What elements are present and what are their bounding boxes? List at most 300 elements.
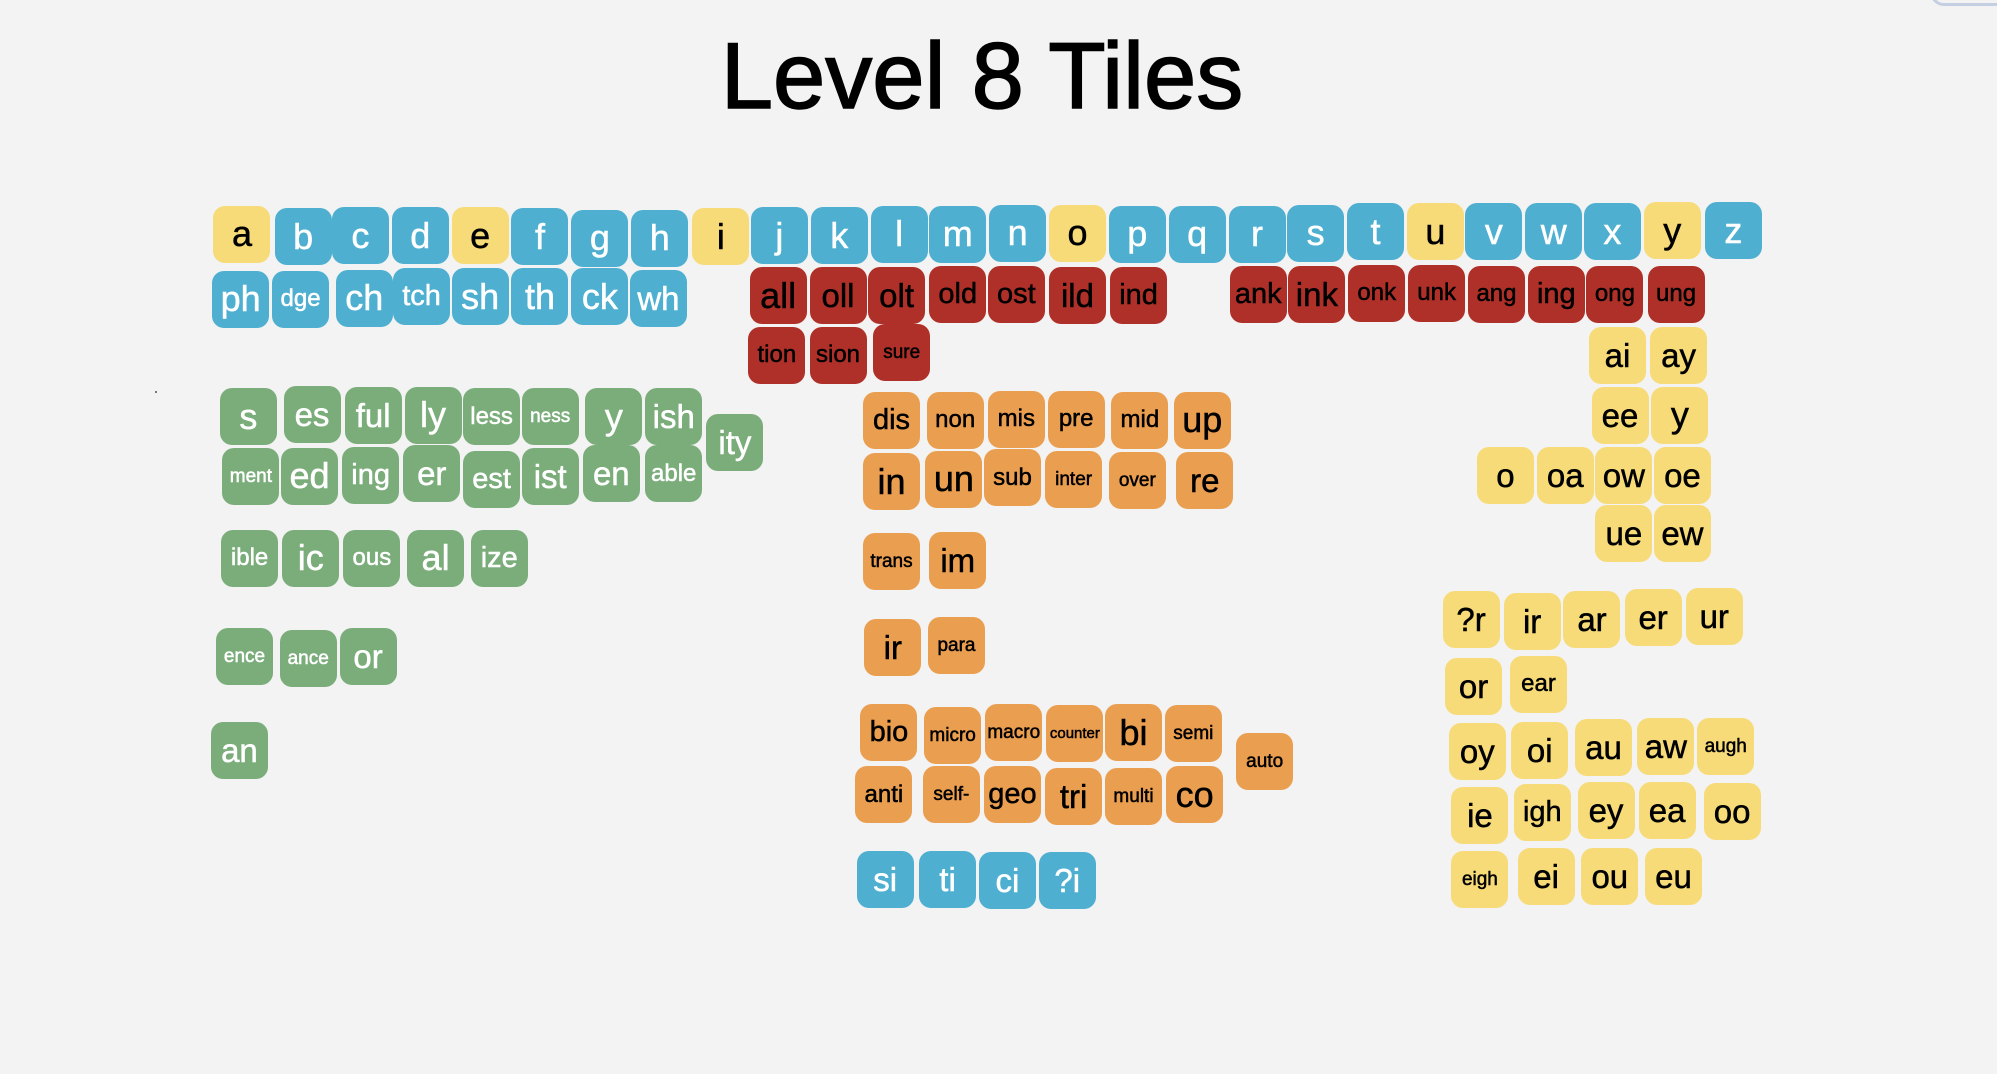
tile: oll: oll <box>822 277 855 314</box>
tile: able: able <box>651 460 696 487</box>
tile: counter: counter <box>1050 725 1100 742</box>
tile: ence <box>216 628 273 685</box>
tile: ow <box>1595 447 1652 504</box>
panel: green suffixes row four <box>216 628 397 687</box>
tile: unk <box>1408 265 1465 322</box>
tile: o: o <box>1067 212 1087 253</box>
panel: alphabet row <box>213 202 1762 267</box>
tile: al: al <box>422 537 450 578</box>
tile: unk: unk <box>1417 279 1456 306</box>
tile: b <box>275 208 332 265</box>
tile: oy <box>1449 723 1506 780</box>
tile: ence: ence <box>224 646 265 667</box>
tile: h <box>631 210 688 267</box>
tile: ing <box>1528 266 1585 323</box>
tile: x: x <box>1603 211 1621 252</box>
tile: old: old <box>938 278 977 310</box>
tile: aw <box>1637 718 1694 775</box>
tile: est <box>463 450 520 508</box>
tile: igh <box>1514 784 1571 841</box>
tile: wh: wh <box>637 280 680 317</box>
tile: v: v <box>1485 211 1503 252</box>
tile: ai: ai <box>1605 337 1630 374</box>
tile: ind <box>1110 267 1167 324</box>
tile: ful <box>345 387 402 444</box>
tile: ost: ost <box>997 278 1036 310</box>
tile: mis <box>988 391 1045 448</box>
tile: ea <box>1639 782 1696 839</box>
tile: semi <box>1165 705 1222 762</box>
tile: or: or <box>1459 668 1488 705</box>
tile: para: para <box>937 635 975 656</box>
tile: oa: oa <box>1547 457 1584 494</box>
tile: ar: ar <box>1577 601 1607 638</box>
tile: ly <box>405 387 462 444</box>
tile: es: es <box>295 396 329 433</box>
tile: j <box>751 207 808 264</box>
tile: ?r: ?r <box>1456 601 1486 638</box>
tile: sion <box>810 327 867 384</box>
tile: ize: ize <box>481 542 518 574</box>
tile: sh <box>452 268 509 325</box>
tile: c: c <box>351 215 369 256</box>
tile: pre: pre <box>1059 405 1094 432</box>
tile: over: over <box>1119 470 1156 491</box>
tile: ue <box>1595 505 1652 562</box>
tile: tri: tri <box>1060 778 1087 815</box>
tile: ly: ly <box>420 394 446 435</box>
tile: augh <box>1697 718 1754 775</box>
tile: ai <box>1589 327 1646 384</box>
tile: augh: augh <box>1705 736 1747 757</box>
tile: ir: ir <box>1523 603 1541 640</box>
tile: eu <box>1645 848 1702 905</box>
tile: er <box>1625 589 1682 646</box>
tile: ing: ing <box>351 459 390 491</box>
tile: er: er <box>1638 599 1668 636</box>
tile: eigh: eigh <box>1462 869 1498 890</box>
tile: macro <box>985 704 1042 761</box>
tile: ank <box>1230 266 1287 323</box>
tile: d: d <box>410 215 430 256</box>
tile: im <box>929 532 986 589</box>
tile: or <box>1445 658 1502 715</box>
tile: ful: ful <box>356 397 391 434</box>
tile: auto <box>1236 733 1293 790</box>
tile: ey: ey <box>1589 792 1623 829</box>
tile: olt: olt <box>879 277 914 314</box>
tile: all <box>750 267 807 324</box>
tile: w: w <box>1541 211 1567 252</box>
tile: u: u <box>1425 211 1445 252</box>
tile: ur <box>1686 588 1743 645</box>
tile: dge: dge <box>281 285 321 312</box>
tile: pre <box>1048 391 1105 448</box>
tile: ink: ink <box>1296 276 1338 313</box>
tile: re: re <box>1190 462 1219 499</box>
tile: ink <box>1288 266 1345 323</box>
tile: e <box>452 207 509 264</box>
tile: oi <box>1511 722 1568 779</box>
tile: z <box>1705 202 1762 259</box>
tile: geo <box>984 766 1041 823</box>
tile: si: si <box>873 861 897 898</box>
tile: un <box>925 450 982 508</box>
tile: all: all <box>760 275 796 316</box>
panel: red welded sounds one <box>750 266 1167 324</box>
tile: p <box>1109 206 1166 263</box>
tile: y <box>585 388 642 445</box>
tile: ous <box>343 530 400 586</box>
tile: micro <box>924 707 981 764</box>
tile: sure <box>873 324 930 381</box>
tile: ?r <box>1443 591 1500 648</box>
tile: geo: geo <box>988 778 1037 810</box>
tile: er: er <box>417 455 446 492</box>
tile: y: y <box>1663 210 1681 251</box>
tile: ment: ment <box>230 466 272 487</box>
panel: yellow vowel teams <box>1449 718 1761 908</box>
tile: p: p <box>1127 213 1147 254</box>
tile: dis <box>863 392 920 449</box>
tile: sub: sub <box>993 464 1032 491</box>
tile: er <box>403 445 460 502</box>
tile: non: non <box>935 406 975 433</box>
tile: th <box>511 268 568 325</box>
tile: ment <box>222 448 279 505</box>
tile: y: y <box>605 396 623 437</box>
tile: old <box>929 266 986 323</box>
tile: multi <box>1105 768 1162 825</box>
tile: ci: ci <box>995 862 1019 899</box>
tile: ci <box>979 852 1036 909</box>
tile: si <box>857 851 914 908</box>
tile: ild <box>1049 267 1106 324</box>
tile: ish: ish <box>653 398 695 435</box>
tile: ck <box>571 268 628 325</box>
tile: ness: ness <box>530 406 570 427</box>
tile: m: m <box>943 213 973 254</box>
window corner <box>1930 0 1997 6</box>
tile: ist <box>522 448 579 505</box>
tile: g: g <box>590 217 610 258</box>
panel: orange prefixes <box>863 391 1233 510</box>
tile: aw: aw <box>1645 728 1687 765</box>
tile: ?i <box>1039 852 1096 909</box>
tile: ar <box>1563 591 1620 648</box>
tile: c <box>332 207 389 264</box>
tile: mid <box>1111 392 1168 449</box>
panel: blue digraphs <box>212 268 687 328</box>
tile: ou: ou <box>1591 858 1628 895</box>
tile: trans: trans <box>870 551 913 572</box>
tile: ed <box>281 448 338 505</box>
tile: mid: mid <box>1121 406 1159 433</box>
title: Level 8 Tiles <box>721 23 1243 128</box>
tile: ei: ei <box>1533 858 1559 895</box>
tile: s <box>1287 205 1344 262</box>
tile: tion: tion <box>758 341 796 368</box>
tile: ou <box>1581 848 1638 905</box>
tile: q <box>1169 206 1226 263</box>
tile: tch: tch <box>402 280 441 312</box>
tile: or: or <box>353 638 383 675</box>
tile: ee: ee <box>1602 397 1638 434</box>
tile: t <box>1347 203 1404 260</box>
tile: macro: macro <box>987 722 1040 743</box>
tile: ity <box>706 414 763 471</box>
tile: j: j <box>775 215 783 256</box>
panel: orange ir para <box>864 617 985 676</box>
tile: ind: ind <box>1119 279 1158 311</box>
tile: micro: micro <box>929 725 976 746</box>
tile: n <box>989 205 1046 262</box>
tile: o <box>1049 205 1106 262</box>
tile: o <box>1477 447 1534 504</box>
tile: ity: ity <box>718 424 751 461</box>
tile: y: y <box>1671 394 1689 435</box>
tile: ed: ed <box>289 455 329 496</box>
tile: ay: ay <box>1661 337 1696 374</box>
tile: ue: ue <box>1605 515 1642 552</box>
tile: auto: auto <box>1246 751 1283 772</box>
tile: ic: ic <box>298 537 324 578</box>
tile: ch <box>336 270 393 327</box>
tile: v <box>1465 203 1522 260</box>
tile: s: s <box>1307 212 1325 253</box>
tile: es <box>284 386 341 443</box>
tile: r <box>1229 206 1286 263</box>
panel: yellow r-controlled vowels <box>1443 588 1743 715</box>
tile: ei <box>1518 848 1575 905</box>
tile: less <box>463 388 520 445</box>
tile: sh: sh <box>461 276 499 317</box>
tile: est: est <box>472 462 511 494</box>
tile: bi: bi <box>1119 712 1148 753</box>
tile: multi: multi <box>1113 786 1154 807</box>
tile: onk: onk <box>1357 279 1396 306</box>
tile: ang: ang <box>1476 280 1516 307</box>
tile: th: th <box>525 276 555 317</box>
tile: ch: ch <box>345 277 383 318</box>
tile: oi: oi <box>1527 732 1553 769</box>
panel: yellow long vowels <box>1477 327 1711 562</box>
tile: oy: oy <box>1460 733 1495 770</box>
tile: a <box>213 206 270 263</box>
tile: l: l <box>895 213 903 254</box>
tile: ew: ew <box>1661 515 1704 552</box>
tile: r: r <box>1251 213 1263 254</box>
tile: y <box>1644 202 1701 259</box>
tile: s: s <box>239 396 257 437</box>
tile: or <box>340 628 397 685</box>
panel: orange greek and latin prefixes <box>855 704 1293 825</box>
tile: up: up <box>1182 399 1222 440</box>
panel: red suffix sounds <box>748 324 930 384</box>
tile: sub <box>984 449 1041 506</box>
tile: s <box>220 388 277 445</box>
tile: ank: ank <box>1235 278 1282 310</box>
tile: ist: ist <box>534 458 567 495</box>
tile: oa <box>1537 447 1594 504</box>
tile: able <box>645 445 702 502</box>
tile: co: co <box>1176 774 1214 815</box>
tile: t: t <box>1370 211 1380 252</box>
tile: ph <box>212 271 269 328</box>
speck <box>155 391 157 393</box>
tile: tri <box>1045 768 1102 825</box>
tile: h: h <box>650 217 670 258</box>
tile: mis: mis <box>998 405 1035 432</box>
tile: i: i <box>717 216 725 257</box>
tile: ck: ck <box>582 276 618 317</box>
tile: ung <box>1648 266 1705 323</box>
tile: ea: ea <box>1649 792 1685 829</box>
tile: i <box>692 208 749 265</box>
tile: n: n <box>1008 212 1028 253</box>
tile: au <box>1575 719 1632 776</box>
tile: ous: ous <box>353 544 391 571</box>
tile: ear <box>1510 656 1567 713</box>
tile: ir <box>1504 593 1561 650</box>
tile: z: z <box>1724 210 1742 251</box>
tile: ible <box>221 530 278 586</box>
tile: anti: anti <box>865 781 903 808</box>
tile: oe: oe <box>1664 457 1701 494</box>
tile: dis: dis <box>873 404 910 436</box>
tile: y <box>1651 387 1708 444</box>
tile: tch <box>393 268 450 325</box>
tile: a: a <box>232 213 252 254</box>
tile: oll <box>810 267 867 324</box>
tile: an: an <box>221 732 258 769</box>
tile: f <box>511 208 568 265</box>
tile: oe <box>1654 447 1711 504</box>
tile: im: im <box>940 542 975 579</box>
tile: b: b <box>293 216 313 257</box>
tile: ph: ph <box>221 278 261 319</box>
panel: green suffixes row three <box>221 530 528 587</box>
tile: k <box>811 207 868 264</box>
tile: counter <box>1046 705 1103 762</box>
tile: less: less <box>470 403 513 430</box>
tile: e: e <box>470 215 490 256</box>
tile: ic <box>282 530 339 586</box>
tile: tion <box>748 327 805 384</box>
tile: q: q <box>1187 213 1207 254</box>
tile: ew <box>1654 505 1711 562</box>
tile: ee <box>1592 387 1649 444</box>
tile: ay <box>1650 327 1707 384</box>
tile: en: en <box>593 455 630 492</box>
tile: bi <box>1105 704 1162 761</box>
tile: up <box>1174 392 1231 449</box>
tile: ost <box>988 266 1045 323</box>
panel: orange trans im <box>863 532 986 590</box>
tile: semi: semi <box>1173 723 1213 744</box>
tile: self-: self- <box>933 784 969 805</box>
tile: ize <box>471 530 528 586</box>
tile: au: au <box>1585 729 1622 766</box>
tile: co <box>1166 766 1223 823</box>
tile: ong <box>1586 266 1643 323</box>
tile: ie: ie <box>1467 797 1493 834</box>
tile: ir: ir <box>884 629 902 666</box>
tile: ti <box>919 851 976 908</box>
tile: an <box>211 722 268 779</box>
tile: sure: sure <box>883 342 920 363</box>
tile: ing <box>342 447 399 504</box>
tile: ing: ing <box>1537 278 1576 310</box>
tile: m <box>929 206 986 263</box>
tile: eu: eu <box>1655 858 1692 895</box>
tile: al <box>407 530 464 586</box>
tile: ong: ong <box>1595 280 1635 307</box>
tile: k: k <box>830 215 848 256</box>
tile: over <box>1109 452 1166 509</box>
tile: ish <box>645 388 702 445</box>
tile: bio: bio <box>870 716 908 748</box>
tile: ance: ance <box>288 648 329 669</box>
tile: dge <box>272 271 329 328</box>
tile: x <box>1584 203 1641 260</box>
tile: en <box>583 445 640 502</box>
tile: bio <box>860 704 917 761</box>
tile: para <box>928 617 985 674</box>
panel: red welded sounds two <box>1230 265 1705 323</box>
tile: sion: sion <box>816 341 860 368</box>
tile: ow: ow <box>1603 457 1645 494</box>
tile: ir <box>864 619 921 676</box>
tile: inter: inter <box>1055 468 1092 490</box>
tile: ness <box>522 388 579 445</box>
tile: re <box>1176 452 1233 509</box>
tile: igh: igh <box>1523 796 1562 828</box>
panel: blue si ti ci <box>857 851 1096 909</box>
tile: ti: ti <box>939 861 956 898</box>
tile: ear: ear <box>1521 670 1556 697</box>
tile: g <box>571 210 628 267</box>
tile: d <box>392 207 449 264</box>
tile: ild: ild <box>1061 277 1094 314</box>
tile: ance <box>280 630 337 687</box>
tile: u <box>1407 203 1464 260</box>
tile: ible: ible <box>231 544 268 571</box>
tile: ey <box>1578 782 1634 839</box>
tile: ur: ur <box>1700 598 1729 635</box>
tile: in <box>863 453 920 510</box>
tile: trans <box>863 533 920 590</box>
tile: un: un <box>934 458 974 499</box>
tile: olt <box>868 267 925 324</box>
tile: eigh <box>1451 851 1508 908</box>
tile: w <box>1525 203 1582 260</box>
tile: self- <box>923 766 980 823</box>
tile: f: f <box>535 216 545 257</box>
panel: green suffixes <box>220 386 763 508</box>
tile: in: in <box>877 461 906 502</box>
tile: ung: ung <box>1656 280 1696 307</box>
tile: ang <box>1468 266 1525 323</box>
tile: oo <box>1704 783 1761 840</box>
tile: ?i: ?i <box>1054 862 1080 899</box>
tile: ie <box>1451 787 1508 844</box>
tile: anti <box>855 766 912 823</box>
tile: l <box>871 206 928 263</box>
tile: non <box>927 392 984 449</box>
tile: wh <box>630 270 687 327</box>
tile: o: o <box>1496 457 1515 494</box>
